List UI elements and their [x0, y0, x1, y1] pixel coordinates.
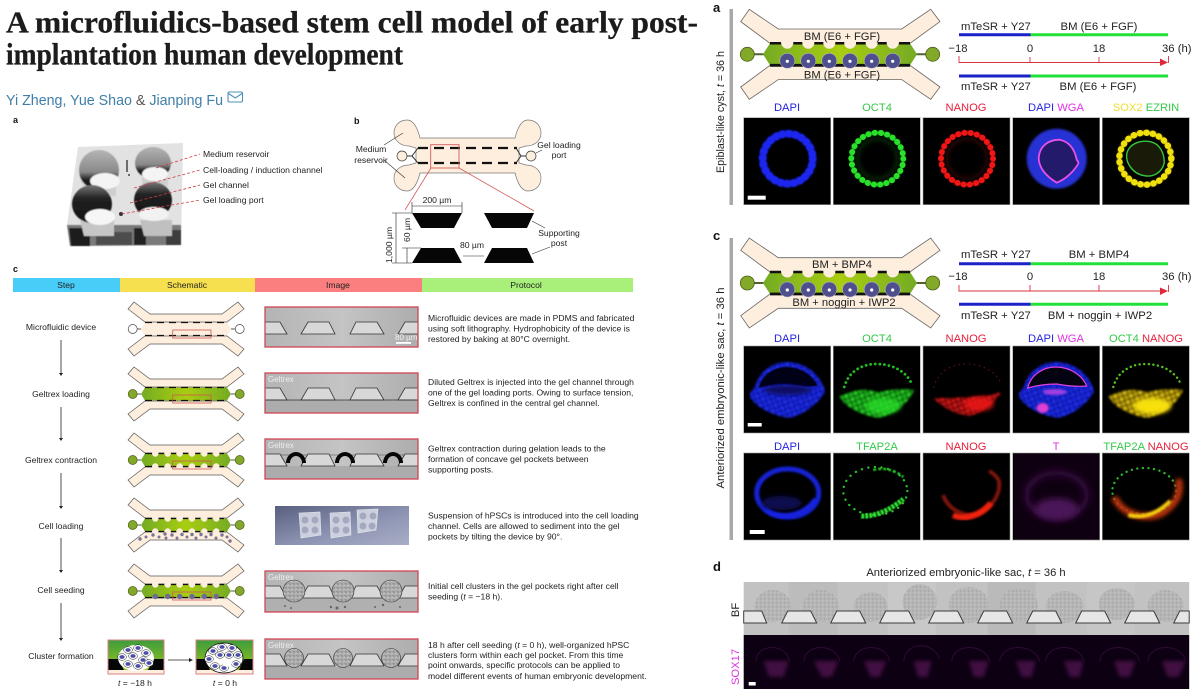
micrograph row	[744, 118, 1189, 205]
marker labels row 2: TFAP2A NANOG	[1103, 441, 1189, 453]
protocol text: restored by baking at 80°C overnight.	[428, 334, 570, 344]
BF strip	[744, 582, 1189, 635]
image: geltrex loading	[265, 373, 418, 413]
right panel d: brightfield and SOX17 strip: SOX17	[730, 649, 742, 685]
schematic	[740, 238, 940, 328]
step labels	[25, 322, 97, 661]
panel b: device design	[354, 116, 581, 263]
table header: Schematic	[167, 280, 208, 290]
protocol text: Initial cell clusters in the gel pockets right after cell	[428, 581, 619, 591]
schematic: BM (E6 + FGF)	[804, 69, 880, 81]
step labels: Cell seeding	[37, 585, 85, 595]
image: microfluidic device	[265, 307, 418, 347]
image: geltrex contraction	[265, 439, 418, 479]
photo: PDMS device	[67, 143, 183, 246]
timeline: mTeSR + Y27	[961, 81, 1031, 93]
timeline: BM (E6 + FGF)	[1060, 81, 1137, 93]
timeline	[948, 21, 1192, 93]
table header: Protocol	[510, 280, 542, 290]
marker labels row 2	[774, 441, 1189, 453]
labels	[203, 149, 323, 205]
protocol text: pockets by tilting the device by 90°.	[428, 532, 562, 542]
timeline: BM (E6 + FGF)	[1061, 21, 1138, 33]
marker labels row 1: DAPI WGA	[1028, 333, 1085, 345]
supporting posts: 80 µm	[460, 240, 484, 250]
protocol text: formation of concave gel pockets between	[428, 454, 589, 464]
marker labels row 1: OCT4	[862, 333, 892, 345]
right panel d: brightfield and SOX17 strip: d	[713, 559, 721, 574]
protocol text: model different events of human embryonic development.	[428, 671, 647, 681]
timeline: 36 (h)	[1162, 271, 1192, 283]
timeline: 0	[1027, 43, 1033, 55]
protocol text: Suspension of hPSCs is introduced into the cell loading	[428, 510, 639, 520]
panel a: device photo: a	[13, 115, 19, 125]
schematic: cluster formation: t = 0 h	[213, 678, 237, 688]
micrograph row 1	[744, 346, 1189, 433]
marker labels: DAPI	[774, 102, 800, 114]
labels: Medium	[356, 144, 386, 154]
step labels: Cell loading	[39, 521, 84, 531]
step labels: Microfluidic device	[26, 322, 96, 332]
step labels: Cluster formation	[28, 651, 94, 661]
labels	[354, 133, 581, 178]
step labels: Geltrex loading	[32, 389, 90, 399]
timeline: 18	[1093, 271, 1105, 283]
title: A microfluidics-based stem cell model of early post-	[6, 6, 698, 40]
right panel a: epiblast-like cyst: a	[713, 0, 721, 15]
right panel d: brightfield and SOX17 strip: Anteriorized embryonic-like sac, t = 36 h	[866, 567, 1066, 579]
marker labels: OCT4	[862, 102, 892, 114]
timeline: BM + BMP4	[1069, 249, 1129, 261]
timeline: mTeSR + Y27	[961, 310, 1031, 322]
marker labels row 1	[774, 333, 1183, 345]
right panel a: epiblast-like cyst: Epiblast-like cyst, t = 36 h	[715, 51, 727, 173]
timeline: 36 (h)	[1162, 43, 1192, 55]
protocol text: Diluted Geltrex is injected into the gel channel through	[428, 377, 634, 387]
image: cluster formation	[265, 639, 418, 679]
schematic: cluster formation	[108, 640, 253, 688]
protocol text: supporting posts.	[428, 464, 493, 474]
labels: Gel loading port	[203, 195, 264, 205]
marker labels row 2: T	[1053, 441, 1060, 453]
supporting posts: 1,000 µm	[384, 227, 394, 263]
image: device photo	[275, 506, 409, 545]
marker labels row 2: NANOG	[945, 441, 987, 453]
icon: mail envelope	[228, 92, 242, 102]
protocol text: point onwards, specific protocols can be applied to	[428, 660, 620, 670]
schematic: cluster formation: t = −18 h	[118, 678, 152, 688]
protocol text: using soft lithography. Hydrophobicity of the device is	[428, 324, 630, 334]
authors: Yi Zheng, Yue Shao & Jianping Fu	[6, 92, 223, 109]
labels: reservoir	[354, 155, 388, 165]
title	[6, 6, 698, 72]
timeline: mTeSR + Y27	[961, 249, 1031, 261]
labels: port	[552, 150, 567, 160]
timeline: mTeSR + Y27	[961, 21, 1031, 33]
bone-shaped device	[394, 120, 541, 211]
step labels: Geltrex contraction	[25, 455, 97, 465]
SOX17 strip	[744, 635, 1189, 689]
labels: Gel channel	[203, 180, 249, 190]
right panel d: brightfield and SOX17 strip	[713, 559, 1189, 689]
schematic: cell seeding	[128, 564, 244, 618]
right panel a: epiblast-like cyst	[713, 0, 1192, 205]
timeline: −18	[948, 271, 968, 283]
supporting posts: post	[551, 238, 568, 248]
protocol text: channel. Cells are allowed to sediment into the gel	[428, 521, 620, 531]
schematic: geltrex loading	[128, 367, 244, 421]
marker labels	[774, 102, 1179, 114]
protocol text: one of the gel loading ports. Owing to surface tension,	[428, 388, 633, 398]
image: cell seeding	[265, 571, 418, 612]
protocol text: Geltrex contraction during gelation leads to the	[428, 444, 606, 454]
protocol text: Geltrex is confined in the central gel channel.	[428, 398, 600, 408]
marker labels: NANOG	[945, 102, 987, 114]
image: geltrex contraction: Geltrex	[268, 441, 294, 450]
schematic	[740, 9, 940, 99]
image: cell seeding: Geltrex	[268, 573, 294, 582]
timeline: BM + noggin + IWP2	[1048, 310, 1152, 322]
protocol text: Microfluidic devices are made in PDMS and fabricated	[428, 313, 635, 323]
table header: Image	[326, 280, 350, 290]
protocol text	[428, 313, 647, 681]
timeline	[948, 249, 1192, 322]
marker labels row 2: TFAP2A	[856, 441, 898, 453]
marker labels row 1: NANOG	[945, 333, 987, 345]
schematic: microfluidic device	[128, 302, 244, 356]
protocol text: seeding (t = −18 h).	[428, 592, 503, 602]
protocol text: clusters form within each gel pocket. From this time	[428, 650, 624, 660]
image: geltrex loading: Geltrex	[268, 375, 294, 384]
schematic: BM + BMP4	[812, 259, 872, 271]
right panel c: anteriorized embryonic-like sac: c	[713, 228, 720, 243]
right panel c: anteriorized embryonic-like sac: Anteriorized embryonic-like sac, t = 36 h	[715, 288, 727, 488]
right panel c: anteriorized embryonic-like sac	[713, 228, 1192, 540]
panel a: device photo	[13, 115, 323, 246]
supporting posts: 60 µm	[402, 218, 412, 242]
panel c label: c	[13, 264, 18, 274]
timeline: −18	[948, 43, 968, 55]
marker labels: DAPI WGA	[1028, 102, 1085, 114]
protocol text: 18 h after cell seeding (t = 0 h), well-organized hPSC	[428, 640, 629, 650]
image: cluster formation: Geltrex	[268, 641, 294, 650]
schematic: cell loading	[128, 498, 244, 552]
table header	[13, 278, 633, 292]
leader lines	[122, 154, 200, 214]
cluster t = 0 h	[196, 640, 253, 674]
labels: Gel loading	[537, 140, 581, 150]
labels: Cell-loading / induction channel	[203, 165, 323, 175]
supporting posts	[384, 195, 580, 263]
step arrows	[59, 340, 63, 641]
timeline: 18	[1093, 43, 1105, 55]
title: implantation human development	[6, 38, 404, 72]
schematic: BM (E6 + FGF)	[804, 31, 880, 43]
micrograph row 2	[744, 453, 1189, 540]
supporting posts: Supporting	[538, 228, 580, 238]
cluster t = -18 h	[108, 640, 164, 674]
marker labels row 1: OCT4 NANOG	[1109, 333, 1183, 345]
schematic: geltrex contraction	[128, 433, 244, 487]
supporting posts: 200 µm	[423, 195, 451, 205]
right panel d: brightfield and SOX17 strip: BF	[730, 603, 742, 617]
panel b: device design: b	[354, 116, 360, 126]
image: microfluidic device: 80 µm	[395, 333, 418, 342]
marker labels row 2: DAPI	[774, 441, 800, 453]
schematic: BM + noggin + IWP2	[792, 297, 896, 309]
labels: Medium reservoir	[203, 149, 270, 159]
marker labels: SOX2 EZRIN	[1113, 102, 1179, 114]
timeline: 0	[1027, 271, 1033, 283]
table header: Step	[57, 280, 75, 290]
marker labels row 1: DAPI	[774, 333, 800, 345]
